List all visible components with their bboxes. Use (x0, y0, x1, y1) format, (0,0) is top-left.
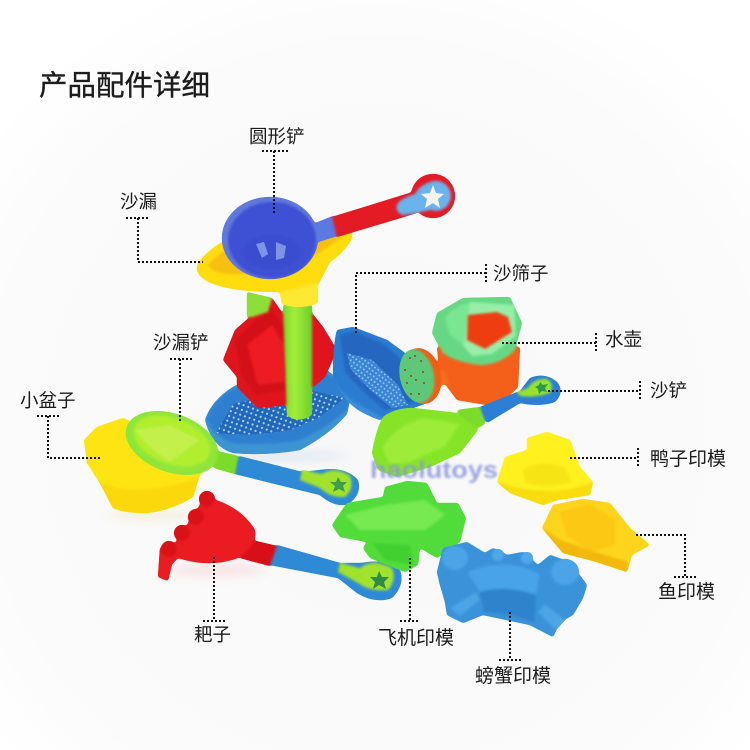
label: 鱼印模: 鱼印模 (658, 581, 715, 603)
icon: fish mould (542, 499, 650, 572)
title: 产品配件详细 (39, 70, 210, 102)
icon: star holes in handles (330, 382, 548, 589)
icon: round shovel star and highlights (256, 185, 444, 260)
icon: blue boat base with red wheel and green pillar (205, 292, 350, 454)
label: 沙筛子 (356, 263, 549, 333)
label: 小盆子: 小盆子 (20, 390, 76, 411)
watermark: haolutoys (370, 457, 498, 484)
label: 耙子 (194, 557, 231, 645)
icon: duck mould (497, 432, 593, 505)
label: 飞机印模: 飞机印模 (378, 627, 454, 649)
label: 螃蟹印模: 螃蟹印模 (475, 665, 551, 687)
icon: airplane mould (332, 481, 466, 572)
icon: yellow sand funnel (197, 222, 352, 307)
toy shadows (105, 450, 350, 576)
label: 沙漏 (120, 191, 203, 262)
label: 圆形铲: 圆形铲 (249, 126, 305, 147)
icon: rake (158, 491, 401, 600)
label: 沙铲: 沙铲 (650, 380, 687, 401)
label: 螃蟹印模 (475, 612, 551, 687)
icon: crab mould (437, 542, 587, 637)
label: 水壶: 水壶 (605, 329, 642, 350)
label: 沙漏铲 (153, 332, 209, 423)
label: 小盆子 (20, 390, 100, 458)
label: 耙子: 耙子 (194, 624, 231, 645)
label: 水壶 (502, 329, 642, 352)
icon: yellow small basin (84, 418, 215, 513)
icon: blue sand sieve (333, 327, 427, 420)
label: 沙漏铲: 沙漏铲 (153, 332, 209, 353)
icon: funnel shovel (117, 399, 359, 505)
label: 沙漏: 沙漏 (120, 191, 157, 212)
icon: green sand shovel (372, 376, 561, 477)
label: 鱼印模 (636, 535, 715, 603)
label: 飞机印模 (378, 558, 454, 649)
icon: round shovel (222, 174, 455, 279)
label: 圆形铲 (249, 126, 305, 215)
label: 沙铲 (548, 380, 687, 401)
label: 鸭子印模: 鸭子印模 (650, 448, 726, 470)
icon: watering can (395, 297, 522, 408)
label: 鸭子印模 (570, 448, 726, 470)
label: 沙筛子: 沙筛子 (493, 263, 549, 284)
